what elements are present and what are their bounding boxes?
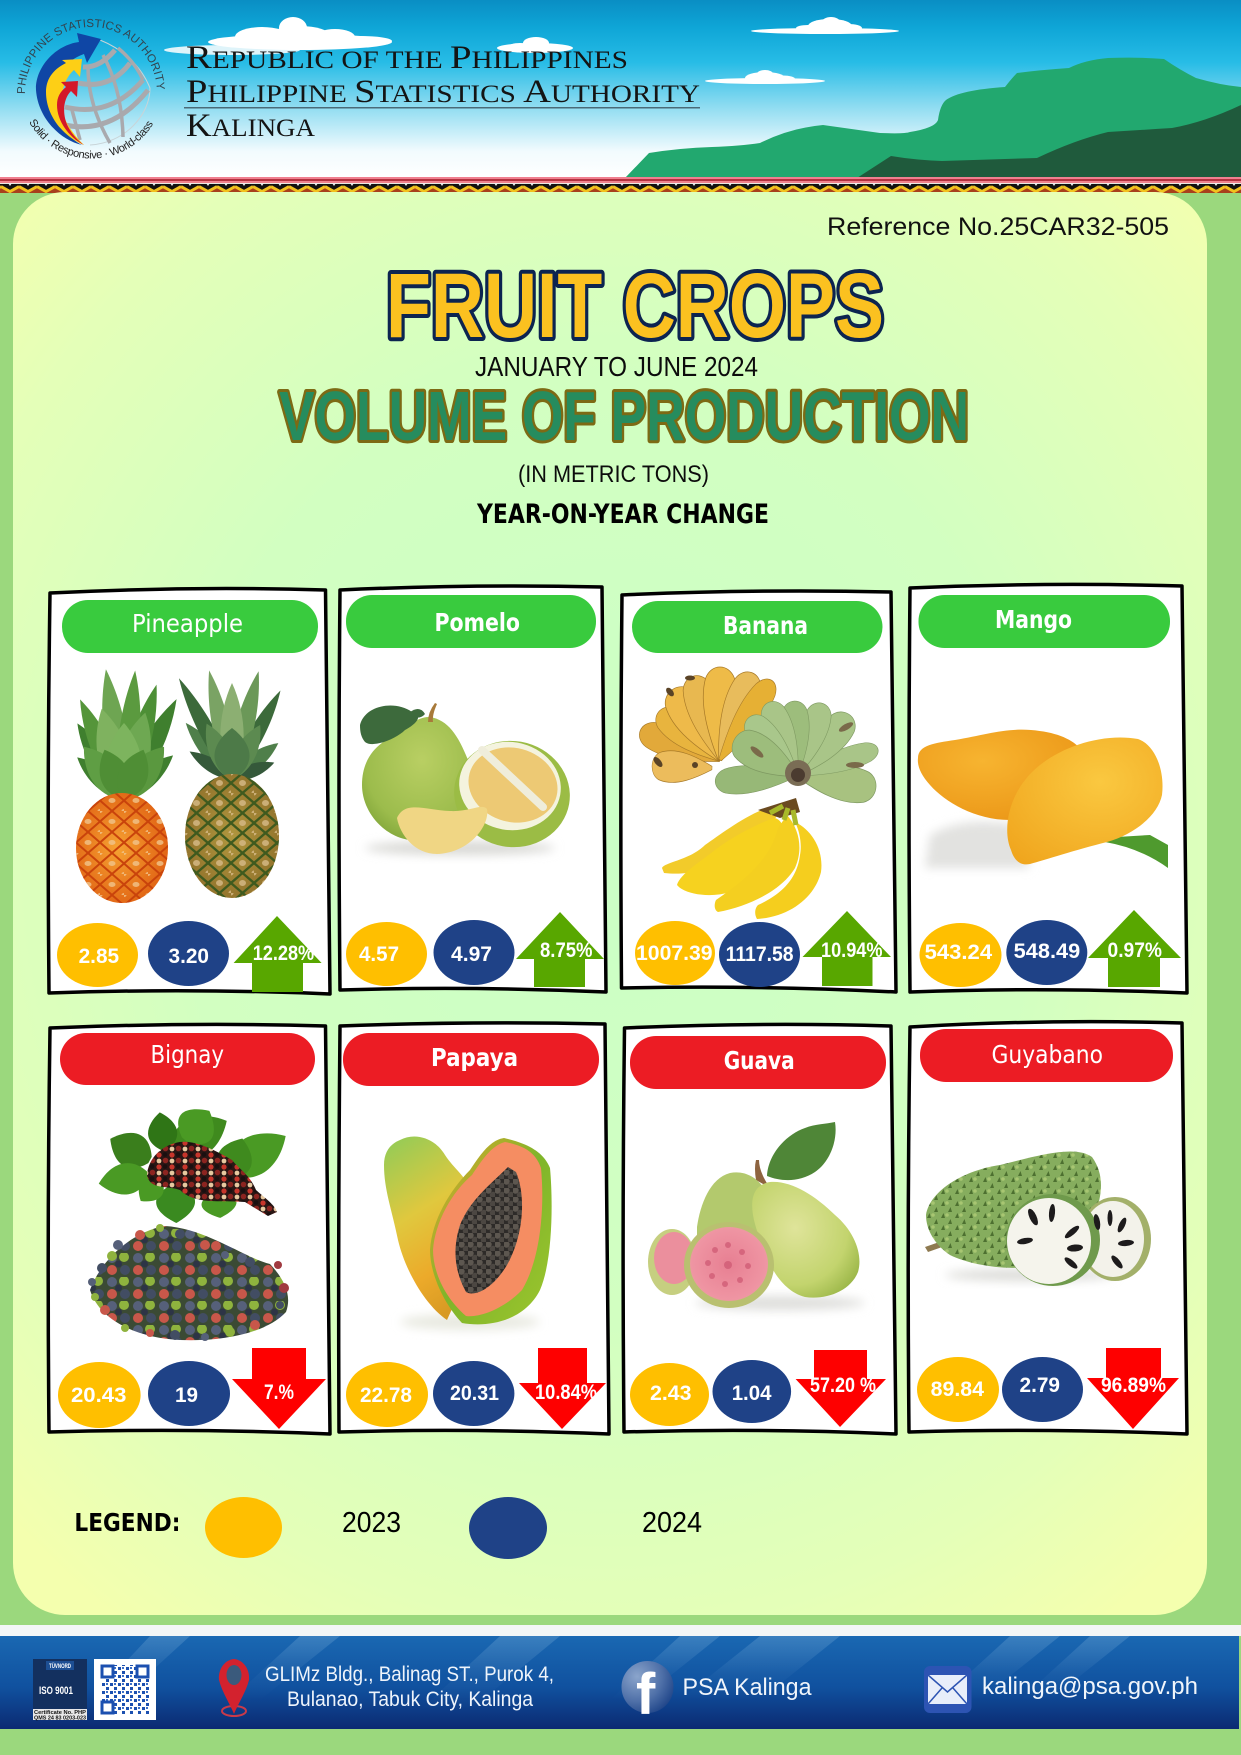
value 2023 (630, 1363, 709, 1426)
value 2024: 548.49 (1014, 940, 1080, 963)
PSA logo: PHILIPPINE STATISTICS AUTHORITY (17, 18, 165, 94)
up arrow with change: 0.97% (1108, 939, 1162, 962)
value 2024 (433, 1361, 514, 1426)
footer (0, 1625, 1241, 1729)
fruit image: bananas (635, 667, 881, 919)
value 2023: 1007.39 (636, 942, 713, 965)
up arrow with change (516, 912, 604, 987)
name pill: Banana (723, 611, 808, 640)
header banner (0, 0, 1241, 177)
value 2023 (920, 923, 1002, 987)
value 2023: 22.78 (360, 1384, 412, 1407)
value 2024: 20.31 (450, 1382, 499, 1405)
icon: location pin (219, 1659, 249, 1716)
fruit image: papaya (384, 1136, 552, 1330)
mountains (625, 58, 1241, 178)
legend: 2023 (342, 1507, 401, 1539)
value 2023 (635, 921, 715, 985)
value 2023 (57, 923, 138, 987)
up arrow with change: 8.75% (540, 939, 593, 962)
subtitle: YEAR-ON-YEAR CHANGE (476, 499, 769, 530)
name pill: Papaya (431, 1043, 518, 1072)
value 2024 (148, 1361, 230, 1426)
card: guyabano (908, 1022, 1187, 1434)
value 2023: 20.43 (71, 1384, 126, 1407)
value 2023 (58, 1362, 141, 1428)
up arrow with change: 10.94% (821, 939, 883, 962)
card: papaya (339, 1023, 609, 1434)
value 2023 (346, 1362, 428, 1427)
name pill (60, 1033, 315, 1085)
up arrow with change: 12.28% (253, 942, 314, 965)
email: kalinga@psa.gov.ph (982, 1673, 1198, 1700)
fruit image: guavas (648, 1122, 865, 1310)
address: GLIMz Bldg., Balinag ST., Purok 4, (265, 1663, 554, 1686)
fruit image: guyabano (925, 1152, 1151, 1286)
name pill (632, 601, 882, 653)
name pill: Bignay (150, 1040, 224, 1069)
legend: LEGEND: (74, 1508, 180, 1537)
up arrow with change (802, 911, 891, 986)
value 2024: 2.79 (1020, 1374, 1060, 1397)
value 2023: 2.43 (650, 1382, 692, 1405)
name pill (346, 595, 596, 648)
main panel (13, 192, 1207, 1615)
down arrow with change (1087, 1348, 1179, 1429)
icon: mail (924, 1666, 972, 1713)
card: guava (623, 1024, 896, 1434)
value 2024 (712, 1360, 791, 1423)
title: volume of production: VOLUME OF PRODUCTION (279, 377, 969, 455)
value 2024: 4.97 (451, 943, 492, 966)
value 2024 (1002, 1357, 1083, 1422)
value 2023: 2.85 (79, 945, 119, 968)
header title text: PHILIPPINE STATISTICS AUTHORITY (186, 74, 700, 110)
address: Bulanao, Tabuk City, Kalinga (287, 1688, 533, 1711)
value 2024 (148, 921, 229, 986)
PSA logo: Solid · Responsive · World-class (30, 119, 152, 158)
QR code (94, 1659, 156, 1720)
value 2024: 19 (175, 1384, 198, 1407)
name pill: Pomelo (434, 608, 520, 637)
card: mango (909, 584, 1187, 993)
icon: facebook (622, 1661, 674, 1727)
facebook name: PSA Kalinga (682, 1674, 812, 1701)
icon: facebook: f (636, 1662, 656, 1727)
name pill: Mango (995, 605, 1072, 634)
date range: JANUARY TO JUNE 2024 (475, 351, 758, 382)
value 2023 (917, 1357, 999, 1422)
down arrow with change (519, 1348, 606, 1429)
ISO certificate badge: Certificate No. PHP (34, 1710, 87, 1716)
name pill (920, 1029, 1173, 1082)
name pill (62, 600, 318, 653)
value 2024: 1117.58 (726, 943, 794, 966)
card: pineapple (48, 589, 330, 994)
name pill (918, 595, 1170, 648)
name pill (343, 1033, 599, 1086)
value 2023: 543.24 (925, 941, 992, 964)
card: bignay (48, 1024, 330, 1434)
name pill: Pineapple (132, 609, 243, 638)
fruit image: pomelo (360, 703, 578, 856)
address (265, 1663, 554, 1711)
down arrow with change: 96.89% (1101, 1374, 1166, 1397)
ISO certificate badge: TÜVNORD (49, 1663, 71, 1670)
down arrow with change: 57.20 % (810, 1374, 876, 1397)
card: banana (621, 591, 896, 992)
header title text (184, 40, 700, 144)
fruit image: bignay (88, 1098, 296, 1341)
clouds (164, 17, 899, 84)
down arrow with change: 10.84% (535, 1381, 597, 1404)
title: fruit crops: FRUIT CROPS (386, 255, 884, 357)
value 2023: 4.57 (359, 943, 399, 966)
unit note: (IN METRIC TONS) (518, 461, 709, 488)
legend: 2024 (642, 1507, 702, 1539)
PSA logo (17, 18, 165, 158)
value 2024 (434, 920, 514, 985)
up arrow with change (1088, 910, 1181, 987)
ISO certificate badge (33, 1659, 87, 1722)
ISO certificate badge: QMS 24 83 0203-023 (34, 1716, 86, 1722)
value 2024: 3.20 (168, 945, 209, 968)
card: pomelo (339, 586, 606, 992)
down arrow with change: 7.% (264, 1381, 294, 1404)
down arrow with change (796, 1350, 886, 1427)
fruit image: pineapples (68, 668, 287, 903)
header title text: REPUBLIC OF THE PHILIPPINES (186, 40, 628, 76)
woven pattern strip (0, 177, 1241, 193)
value 2023 (346, 922, 427, 986)
name pill: Guava (724, 1046, 795, 1075)
value 2024 (1006, 920, 1087, 985)
value 2024 (719, 922, 800, 987)
header title text: KALINGA (186, 108, 315, 144)
name pill (630, 1036, 886, 1089)
up arrow with change (234, 916, 322, 992)
name pill: Guyabano (992, 1040, 1103, 1069)
fruit image: mangoes (918, 730, 1168, 868)
reference number: Reference No.25CAR32-505 (827, 213, 1169, 241)
ISO certificate badge: ISO 9001 (39, 1685, 73, 1697)
value 2023: 89.84 (931, 1378, 984, 1401)
value 2024: 1.04 (732, 1382, 772, 1405)
down arrow with change (232, 1348, 326, 1429)
legend (74, 1497, 702, 1559)
